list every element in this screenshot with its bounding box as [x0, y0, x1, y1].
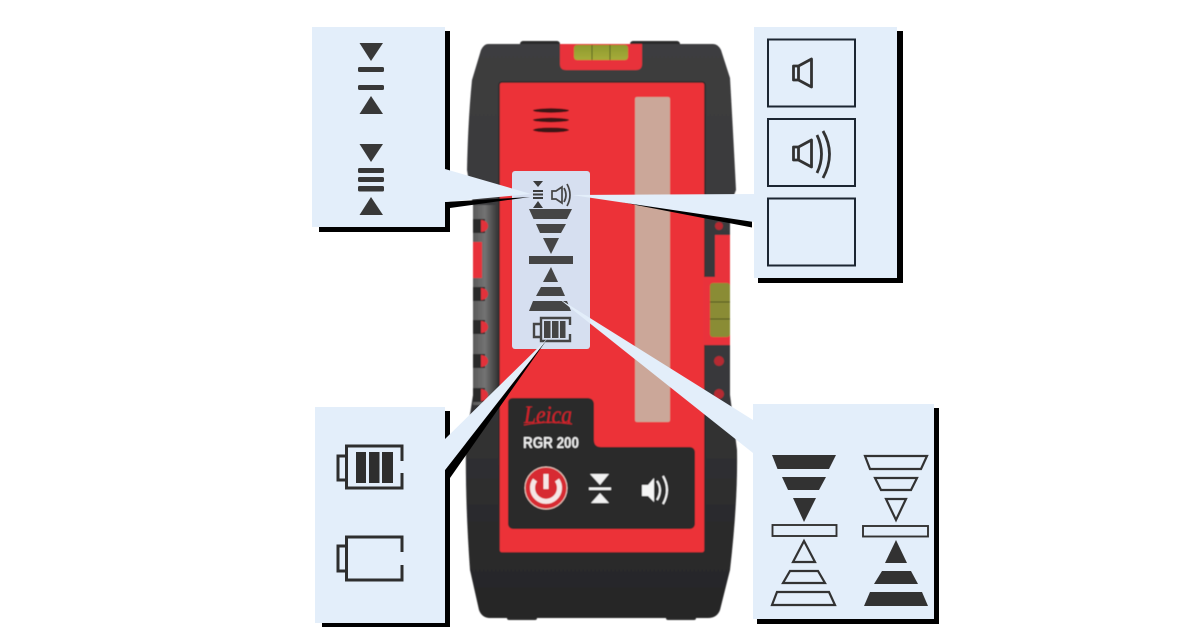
volume button icon [642, 476, 667, 504]
icon: empty battery [338, 537, 402, 580]
box: muted [768, 198, 855, 266]
left side dots [473, 219, 488, 402]
device feet [507, 41, 696, 620]
left red clip [473, 242, 482, 278]
left column: above centre [772, 455, 836, 605]
Leica logo: Leica [523, 402, 572, 429]
top level vial [574, 45, 628, 60]
right level vial [710, 283, 730, 337]
box: low volume [768, 40, 855, 106]
range button icon [589, 474, 611, 503]
LCD centre bar [529, 256, 573, 264]
copper sensor window [635, 97, 670, 422]
right side red section [703, 235, 730, 345]
box: high volume [768, 119, 855, 186]
LCD range icon [533, 181, 543, 208]
top level holder [560, 44, 642, 70]
power button [525, 467, 567, 509]
callout: volume [572, 27, 897, 278]
callout: laser position [558, 298, 934, 619]
LCD upper arrow segments [529, 209, 572, 254]
speaker slots [533, 108, 569, 132]
icon: coarse range [358, 43, 384, 114]
control panel [508, 398, 695, 529]
right side dark column [705, 200, 730, 405]
icon: full battery [338, 446, 402, 488]
callout: range sensitivity [312, 27, 531, 227]
model name: RGR 200 [523, 435, 579, 452]
device: laser receiver [466, 41, 737, 620]
right column: below centre [863, 456, 928, 606]
left side strip [473, 205, 497, 405]
LCD battery icon [534, 318, 570, 341]
device body [466, 44, 737, 618]
LCD display [512, 171, 590, 349]
LCD lower arrow segments [529, 267, 571, 311]
red face [499, 82, 705, 553]
right side dots [714, 222, 724, 399]
callout shadows [319, 31, 939, 627]
callout: battery [315, 338, 548, 623]
LCD speaker icon [552, 184, 570, 206]
icon: fine range [358, 144, 384, 215]
